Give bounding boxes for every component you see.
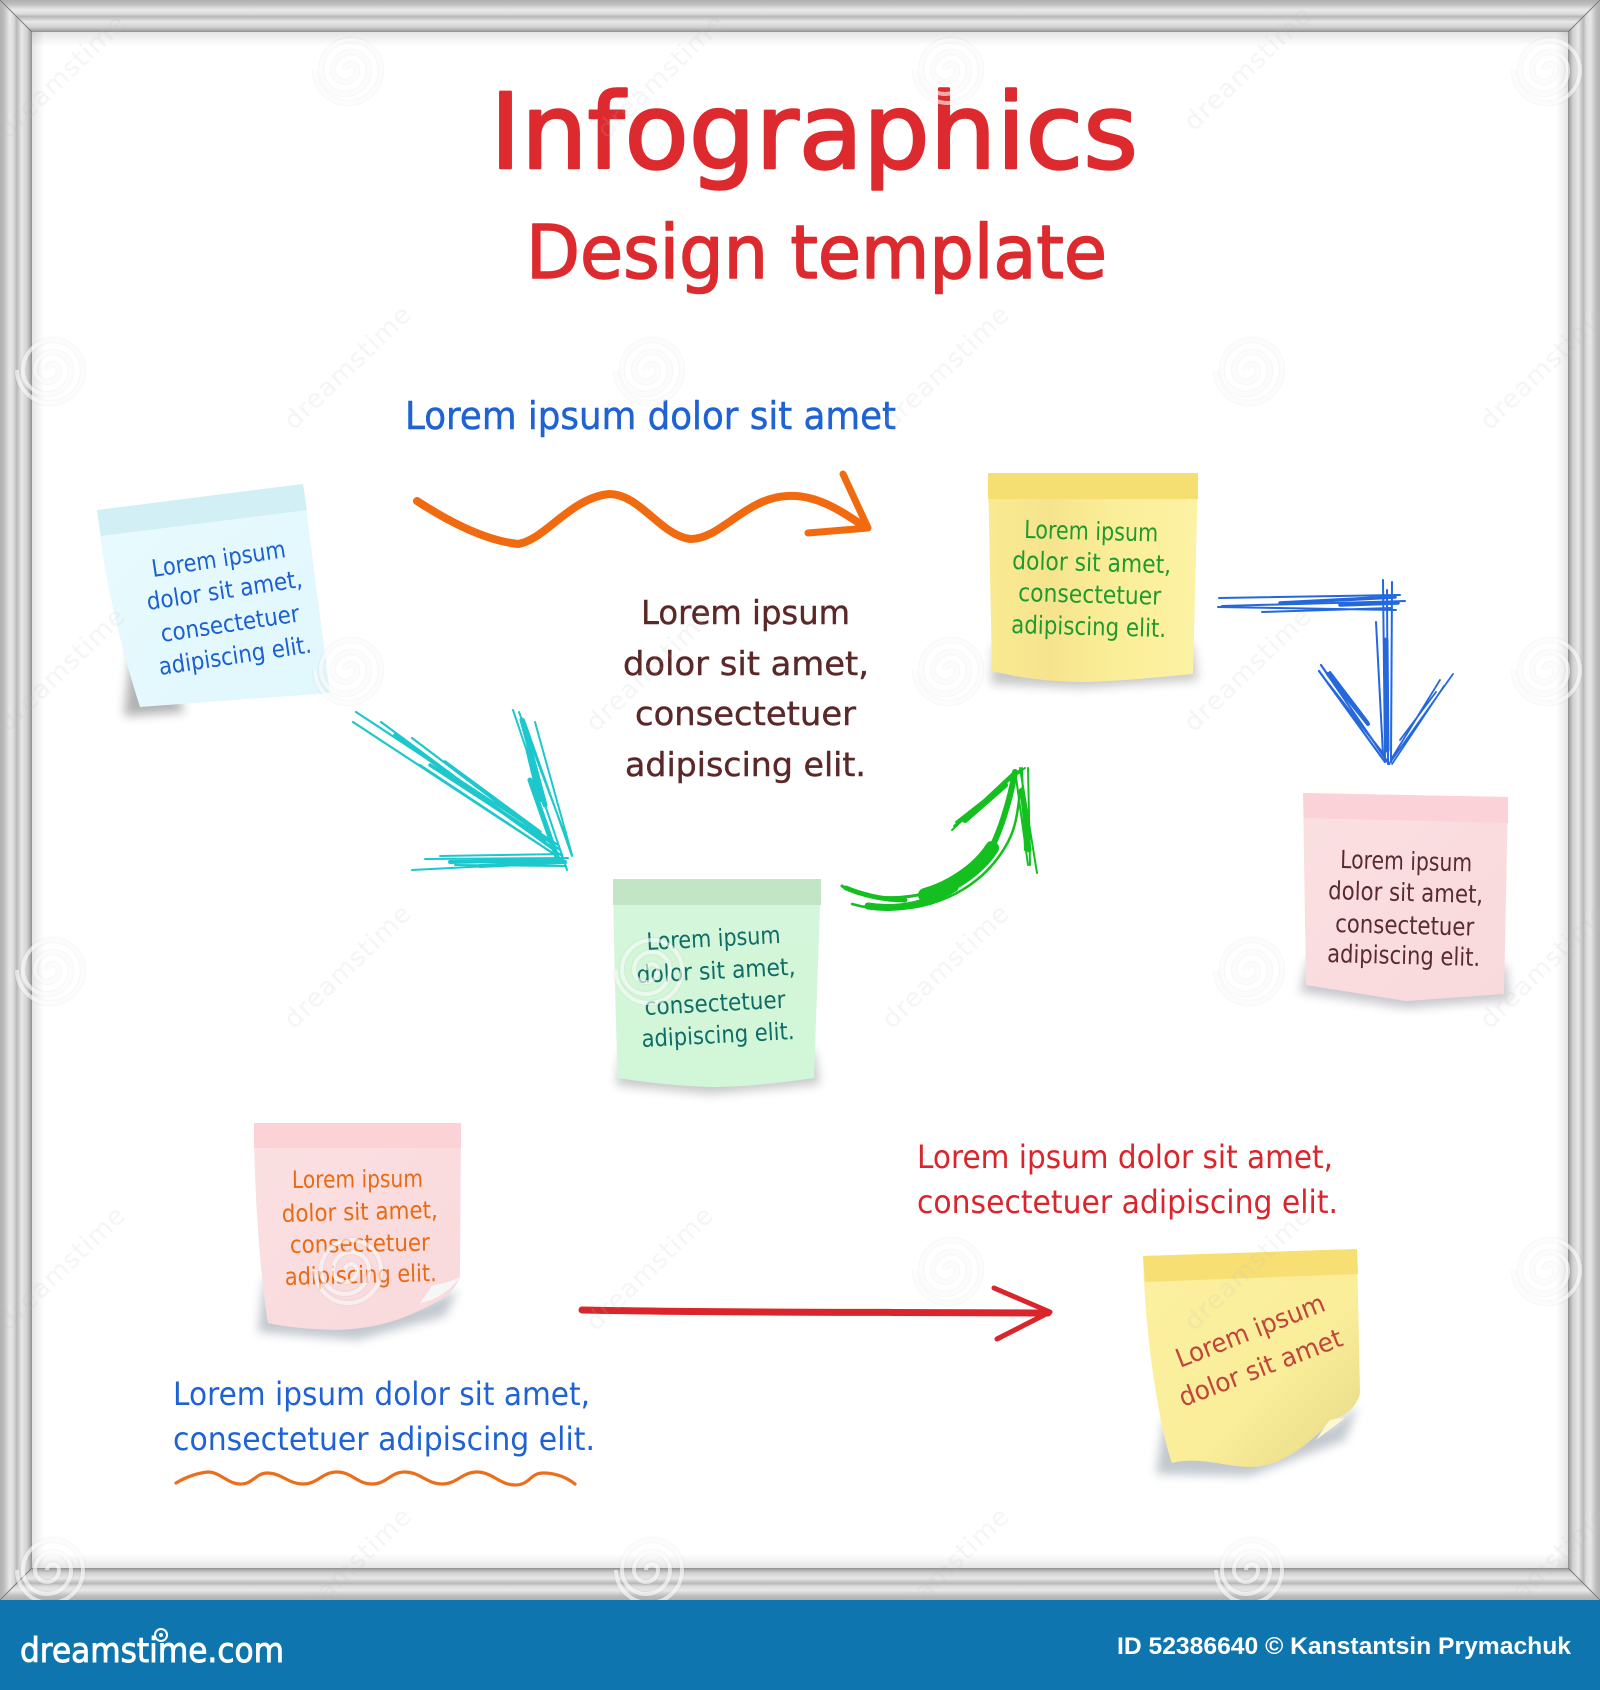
center body text [623,593,869,784]
watermarks: dreamstime [1178,1,1318,137]
center body text: adipiscing elit. [625,745,866,784]
note: green: dolor sit amet, [636,953,796,989]
note: pink right: consectetuer [1335,909,1475,942]
title [490,71,1138,296]
title: Infographics [490,71,1138,193]
note: yellow tilted with curl [1143,1249,1360,1476]
blue caption: consectetuer adipiscing elit. [173,1420,595,1458]
note: yellow: Lorem ipsum [1024,515,1159,548]
heading: top blue text: Lorem ipsum dolor sit amet [405,394,896,438]
note: pink with curl: adipiscing elit. [284,1259,437,1291]
green sketch arrow [842,768,1037,909]
blue caption: Lorem ipsum dolor sit amet, [173,1375,590,1413]
note: blue tilted: consectetuer [159,600,301,648]
note: blue tilted: dolor sit amet, [145,565,304,616]
note: yellow tilted with curl: Lorem ipsum [1172,1289,1330,1375]
title: Design template [526,210,1107,296]
red arrow [582,1288,1050,1339]
watermarks: dreamstime [580,602,720,738]
note: green: adipiscing elit. [641,1017,795,1053]
center body text: Lorem ipsum [641,593,850,632]
note: pink with curl [254,1123,461,1340]
note: pink right: dolor sit amet, [1328,876,1484,909]
footer bar: dreamstime.com [20,1631,284,1671]
watermarks: dreamstime [876,1502,1016,1638]
note: pink with curl: dolor sit amet, [281,1196,438,1228]
watermarks: dreamstime [580,1201,720,1337]
watermarks: dreamstime [876,300,1016,436]
center body text: consectetuer [635,694,856,733]
note: yellow tilted with curl: dolor sit amet [1175,1324,1347,1414]
note: pink right: adipiscing elit. [1327,939,1481,972]
note: blue tilted: Lorem ipsum [150,535,287,583]
note: blue tilted [97,484,330,716]
blue sketch arrow [1218,580,1453,764]
watermarks: dreamstime [1178,602,1318,738]
note: blue tilted: adipiscing elit. [157,630,313,681]
watermarks: dreamstime [591,9,731,145]
orange wavy arrow [417,474,868,544]
red caption: Lorem ipsum dolor sit amet, [917,1138,1333,1176]
watermarks: dreamstime [278,300,418,436]
watermarks: dreamstime [876,899,1016,1035]
note: green: Lorem ipsum [646,921,781,956]
footer bar: ID 52386640 © Kanstantsin Prymachuk [1117,1633,1572,1660]
blue caption [173,1375,595,1458]
watermarks: dreamstime [1178,1201,1318,1337]
red caption: consectetuer adipiscing elit. [917,1183,1338,1221]
note: green: consectetuer [644,986,786,1021]
note: yellow: dolor sit amet, [1012,546,1172,579]
note: yellow: adipiscing elit. [1011,610,1167,643]
note: pink with curl: consectetuer [290,1229,430,1259]
note: pink right [1300,793,1510,1008]
red caption [917,1138,1338,1221]
note: pink right: Lorem ipsum [1340,845,1473,877]
cyan sketch arrow [353,710,572,870]
note: green [613,879,821,1094]
watermarks: dreamstime [278,1502,418,1638]
note: pink with curl: Lorem ipsum [292,1165,423,1194]
orange wavy underline [176,1472,575,1485]
watermarks: dreamstime [278,899,418,1035]
note: yellow: consectetuer [1018,578,1162,611]
note: yellow [988,473,1198,688]
footer bar [0,1600,1600,1690]
center body text: dolor sit amet, [623,644,869,683]
